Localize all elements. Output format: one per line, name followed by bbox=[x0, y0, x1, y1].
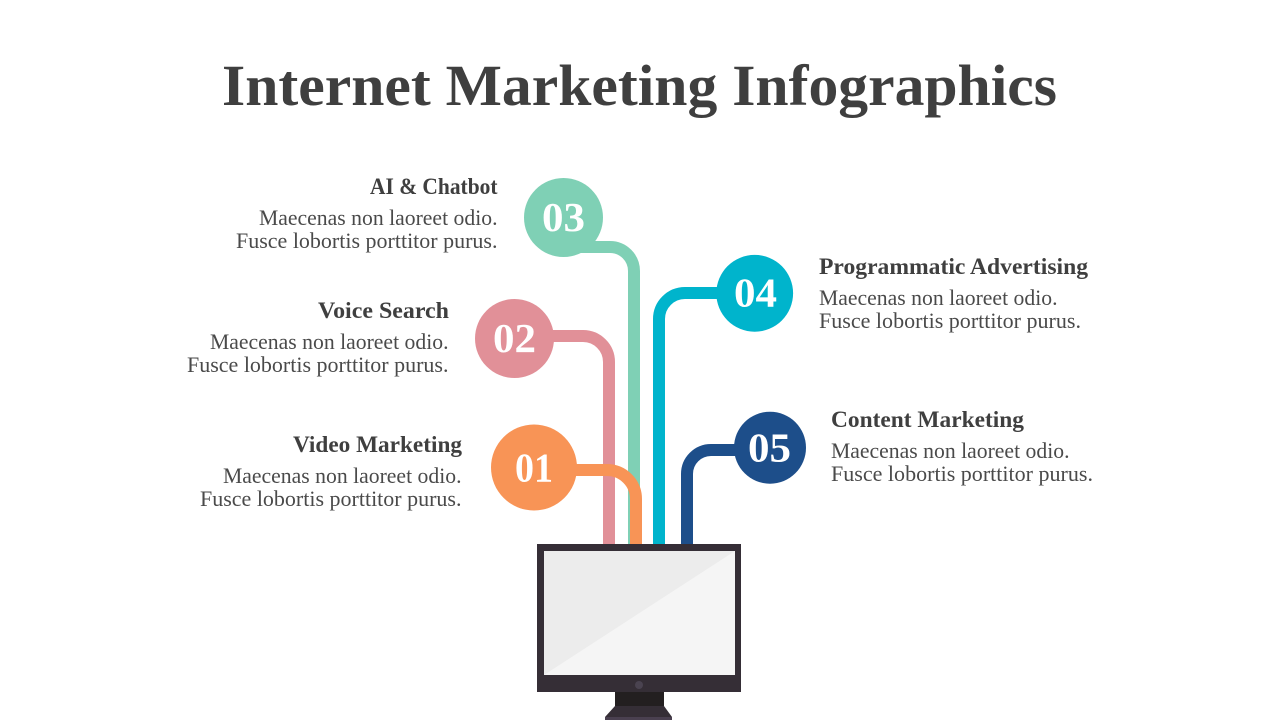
icon: computer monitor bbox=[537, 544, 741, 720]
step 02 badge: 02 bbox=[493, 315, 536, 361]
text block: Voice Search: Maecenas non laoreet odio. bbox=[210, 329, 448, 354]
text block: Programmatic Advertising: Programmatic Advertising bbox=[819, 254, 1089, 279]
connector: 05 bbox=[687, 450, 740, 545]
text block: Video Marketing: Fusce lobortis porttitor purus. bbox=[200, 486, 462, 511]
step 05 badge bbox=[734, 412, 806, 484]
text block: AI & Chatbot: AI & Chatbot bbox=[370, 174, 498, 199]
text block: Video Marketing: Video Marketing bbox=[293, 432, 463, 457]
text block: Programmatic Advertising: Fusce lobortis porttitor purus. bbox=[819, 308, 1081, 333]
step 04 badge: 04 bbox=[734, 270, 777, 316]
text block: AI & Chatbot: Maecenas non laoreet odio. bbox=[259, 205, 498, 230]
title: Internet Marketing Infographics bbox=[222, 53, 1057, 118]
step 03 badge: 03 bbox=[542, 194, 585, 240]
text block: AI & Chatbot bbox=[236, 174, 498, 253]
connector: 04 bbox=[659, 293, 720, 545]
connector: 03 bbox=[575, 247, 634, 545]
connector: 01 bbox=[570, 470, 636, 545]
text block: Voice Search bbox=[187, 298, 449, 377]
step 03 badge bbox=[524, 178, 603, 257]
text block: Video Marketing: Maecenas non laoreet odio. bbox=[223, 463, 462, 488]
text block: Content Marketing: Content Marketing bbox=[831, 407, 1025, 432]
text block: AI & Chatbot: Fusce lobortis porttitor purus. bbox=[236, 228, 498, 253]
text block: Voice Search: Fusce lobortis porttitor purus. bbox=[187, 352, 448, 377]
step 02 badge bbox=[475, 299, 554, 378]
text block: Content Marketing bbox=[831, 407, 1093, 486]
step 01 badge: 01 bbox=[515, 444, 553, 490]
text block: Content Marketing: Maecenas non laoreet odio. bbox=[831, 438, 1070, 463]
text block: Voice Search: Voice Search bbox=[318, 298, 449, 323]
step 05 badge: 05 bbox=[748, 424, 791, 470]
connector: 02 bbox=[550, 336, 609, 545]
text block: Programmatic Advertising bbox=[819, 254, 1089, 333]
step 04 badge bbox=[716, 255, 793, 332]
text block: Programmatic Advertising: Maecenas non laoreet odio. bbox=[819, 285, 1058, 310]
text block: Content Marketing: Fusce lobortis porttitor purus. bbox=[831, 461, 1093, 486]
text block: Video Marketing bbox=[200, 432, 463, 511]
step 01 badge bbox=[491, 424, 577, 510]
